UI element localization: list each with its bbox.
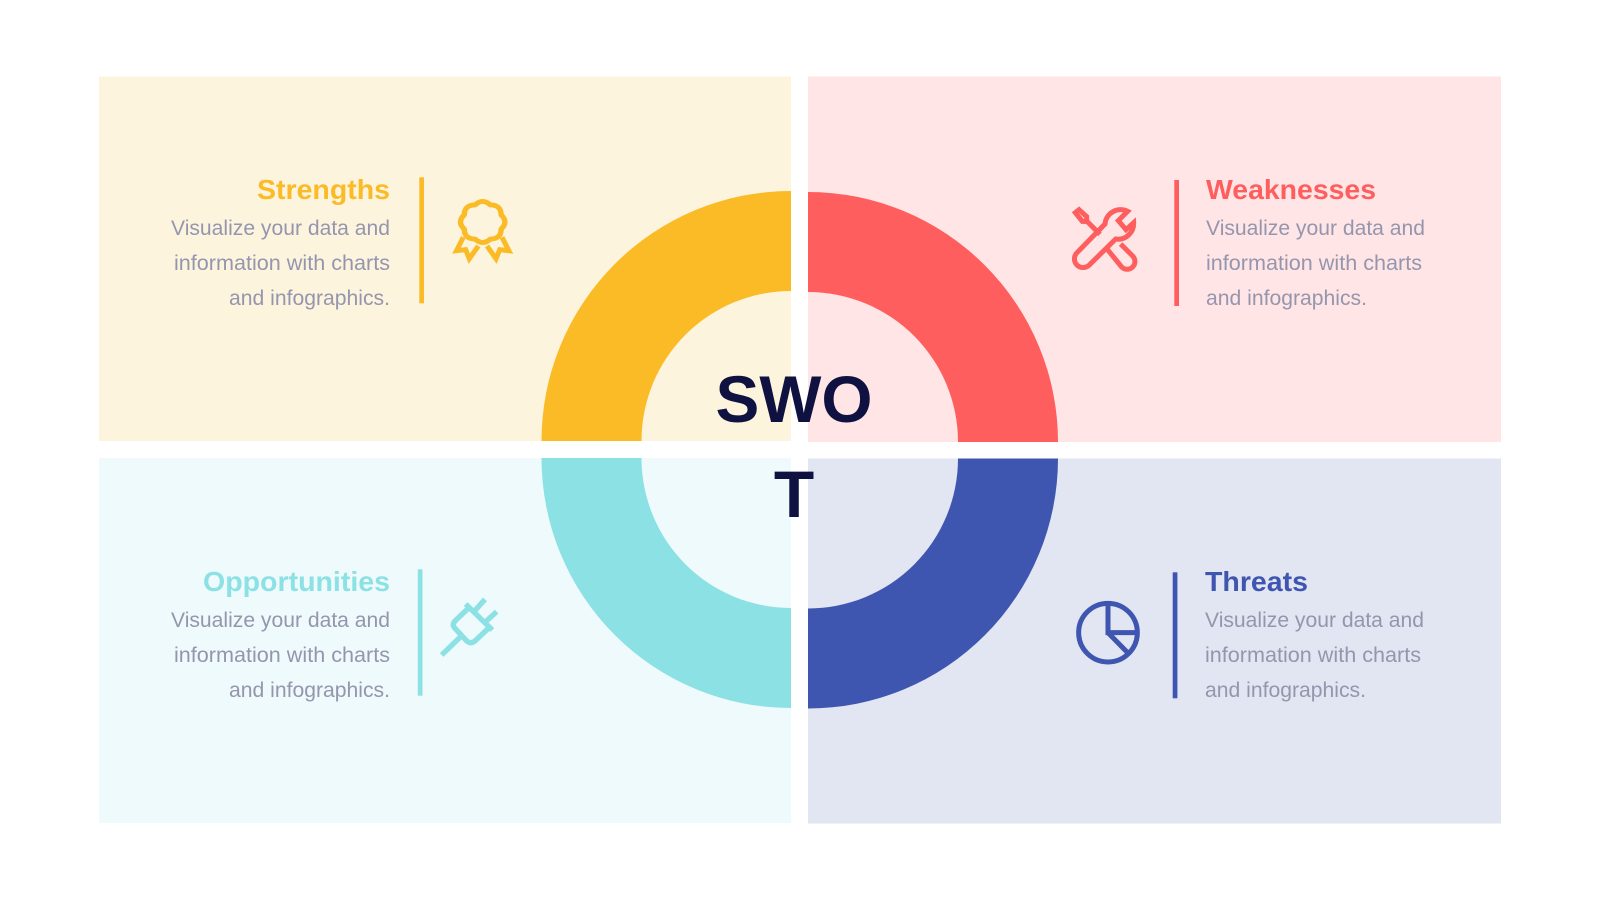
text block: strengths: Visualize your data and bbox=[171, 217, 390, 240]
divider bar: threats bbox=[1173, 572, 1177, 698]
title: SWOT: T bbox=[774, 457, 814, 531]
icon: pie chart bbox=[1079, 603, 1137, 662]
panel: weaknesses bbox=[808, 76, 1501, 442]
heading: opportunities: Opportunities bbox=[203, 566, 390, 597]
divider bar: weaknesses bbox=[1174, 180, 1179, 306]
heading: strengths: Strengths bbox=[257, 174, 390, 205]
text block: opportunities: information with charts bbox=[174, 644, 390, 667]
text block: strengths: information with charts bbox=[174, 252, 390, 275]
ring segment: weaknesses bbox=[808, 192, 1058, 442]
ring segment: strengths bbox=[542, 191, 791, 441]
text block: weaknesses: and infographics. bbox=[1206, 287, 1367, 310]
text block: threats: Visualize your data and bbox=[1205, 609, 1424, 632]
panel: threats bbox=[808, 458, 1501, 824]
text block: opportunities: Visualize your data and bbox=[171, 609, 390, 632]
icon: plug bbox=[442, 599, 497, 655]
text block: strengths bbox=[171, 217, 390, 310]
text block: weaknesses: information with charts bbox=[1206, 252, 1422, 275]
text block: weaknesses: Visualize your data and bbox=[1206, 217, 1425, 240]
divider bar: strengths bbox=[419, 177, 424, 303]
heading: threats: Threats bbox=[1205, 566, 1308, 597]
text block: threats: and infographics. bbox=[1205, 679, 1366, 702]
title: SWOT bbox=[716, 362, 872, 531]
panel: strengths bbox=[99, 76, 791, 441]
title: SWOT: SWO bbox=[716, 362, 872, 436]
icon: award ribbon bbox=[456, 201, 509, 259]
divider bar: opportunities bbox=[418, 569, 422, 696]
ring segment: opportunities bbox=[542, 458, 791, 708]
panel: opportunities bbox=[99, 458, 791, 823]
text block: weaknesses bbox=[1206, 217, 1425, 310]
text block: opportunities bbox=[171, 609, 390, 702]
icon: wrench and screwdriver bbox=[1074, 210, 1135, 269]
ring segment: threats bbox=[808, 458, 1058, 708]
text block: threats: information with charts bbox=[1205, 644, 1421, 667]
heading: weaknesses: Weaknesses bbox=[1206, 174, 1376, 205]
text block: opportunities: and infographics. bbox=[229, 679, 390, 702]
text block: strengths: and infographics. bbox=[229, 287, 390, 310]
text block: threats bbox=[1205, 609, 1424, 702]
